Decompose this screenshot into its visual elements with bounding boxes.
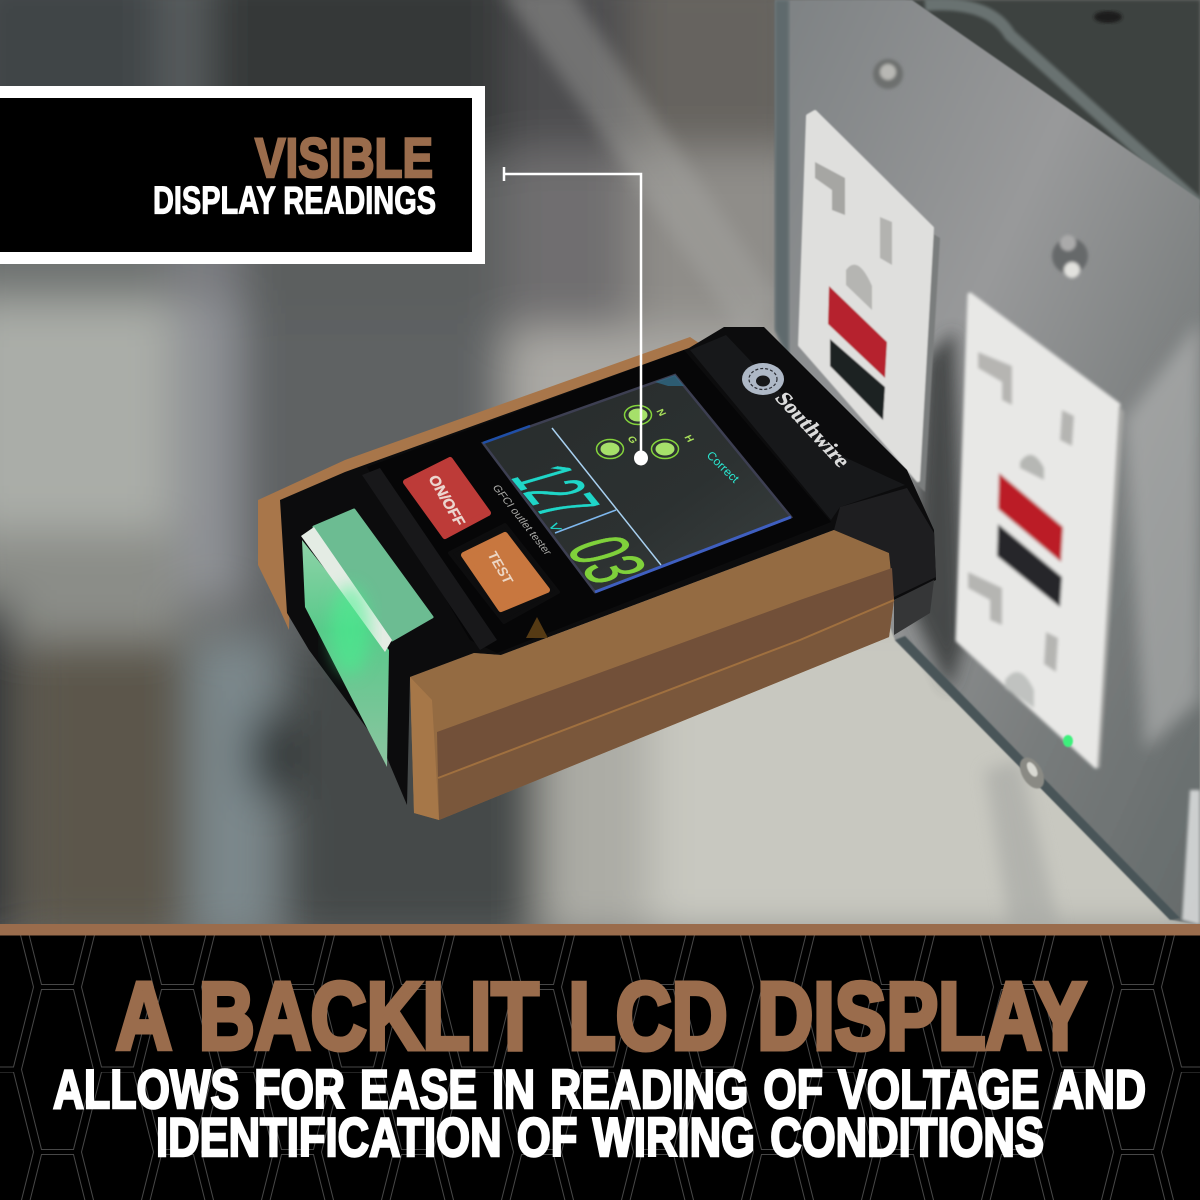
warning triangle xyxy=(526,617,548,638)
blurred photo background xyxy=(0,0,1200,940)
reset button upper xyxy=(828,286,887,378)
reset button lower xyxy=(998,473,1063,562)
face panel frame xyxy=(367,350,831,653)
footer body xyxy=(53,1058,1146,1168)
green status light xyxy=(301,510,432,767)
LED labels: H xyxy=(681,434,696,444)
rear brown shell xyxy=(258,337,702,630)
front brown shell xyxy=(410,530,894,820)
sockets lower xyxy=(978,352,1012,405)
footer panel xyxy=(0,924,1200,1200)
timing reading: 03 xyxy=(548,528,665,592)
screw: bottom xyxy=(1015,753,1049,793)
LED labels xyxy=(624,408,696,446)
TEST button xyxy=(450,525,558,622)
LED labels: N xyxy=(653,408,668,418)
callout subheading: DISPLAY READINGS xyxy=(153,180,436,222)
printed label: GFCI outlet tester xyxy=(489,483,554,557)
callout heading: VISIBLE xyxy=(255,126,433,189)
black body xyxy=(280,327,936,805)
wiring LEDs xyxy=(596,406,678,458)
voltage reading: V xyxy=(545,522,565,533)
indicator LED xyxy=(1063,735,1073,747)
LED labels: G xyxy=(624,435,639,446)
LCD screen xyxy=(483,375,791,592)
product: GFCI outlet tester xyxy=(258,327,936,820)
test button upper xyxy=(830,339,885,420)
outlet: upper GFCI xyxy=(800,112,940,492)
test button lower xyxy=(997,524,1062,607)
screw: middle xyxy=(1052,235,1088,278)
metal outlet plate and enclosure xyxy=(775,0,1200,925)
voltage reading: 127 xyxy=(493,457,617,527)
logo section facets xyxy=(690,335,905,520)
leader line xyxy=(504,167,648,466)
status text: Correct xyxy=(704,448,743,486)
ON/OFF button xyxy=(406,460,488,536)
outlet: lower GFCI xyxy=(958,295,1124,768)
screw: top xyxy=(873,59,903,89)
ON/OFF button: ON/OFF xyxy=(424,473,468,528)
callout box xyxy=(0,86,485,264)
sockets upper xyxy=(815,162,845,215)
lower right corner block xyxy=(834,488,936,635)
TEST button: TEST xyxy=(484,549,517,586)
Southwire logo xyxy=(742,363,856,471)
voltage reading xyxy=(493,457,617,533)
Southwire logo: Southwire xyxy=(770,388,856,471)
